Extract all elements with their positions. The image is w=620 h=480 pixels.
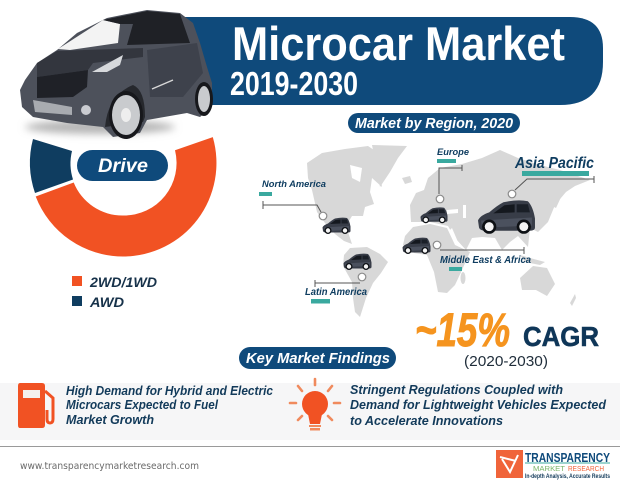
market by region heading pill: Market by Region, 2020	[355, 116, 513, 132]
segment: 2WD/1WD	[36, 137, 216, 256]
CAGR callout: (2020-2030)	[464, 353, 548, 370]
CAGR callout	[415, 303, 599, 370]
logo	[496, 450, 611, 480]
finding 2 text: Demand for Lightweight Vehicles Expected	[350, 398, 606, 412]
website url: www.transparencymarketresearch.com	[20, 461, 199, 472]
car hero image	[20, 10, 213, 139]
legend: 2WD/1WD	[89, 274, 157, 290]
finding 1 text	[66, 384, 273, 427]
world map	[307, 145, 590, 317]
finding 1 text: High Demand for Hybrid and Electric	[66, 384, 273, 398]
region: Asia Pacific	[478, 155, 594, 234]
finding 1 text: Market Growth	[66, 413, 154, 427]
region: North America: North America	[262, 179, 327, 190]
region: Latin America: Latin America	[305, 287, 367, 298]
finding 2 text: Stringent Regulations Coupled with	[350, 383, 563, 397]
icon: fuel pump	[18, 383, 53, 428]
subtitle: years: 2019-2030	[230, 65, 358, 102]
title: Microcar Market: Microcar Market	[232, 17, 565, 70]
key market findings pill: Key Market Findings	[246, 350, 390, 367]
logo: RESEARCH	[568, 466, 604, 473]
region: North America	[259, 179, 350, 234]
finding 2 text: to Accelerate Innovations	[350, 414, 503, 428]
title banner	[180, 17, 603, 105]
finding 2 text	[350, 383, 606, 428]
region: Europe	[420, 147, 470, 223]
icon: light bulb	[290, 379, 340, 430]
region: Asia Pacific: Asia Pacific	[514, 155, 594, 172]
findings band	[0, 383, 620, 440]
drive label pill: Drive	[98, 155, 148, 177]
CAGR callout: ~15%	[415, 303, 510, 356]
logo: MARKET	[533, 466, 566, 473]
drive label pill	[77, 150, 168, 181]
legend: AWD	[89, 294, 124, 310]
region: Latin America	[305, 254, 372, 304]
region: Middle East & Africa: Middle East & Africa	[440, 255, 532, 266]
segment: AWD	[30, 139, 73, 193]
region: Middle East & Africa	[402, 238, 532, 271]
finding 1 text: Microcars Expected to Fuel	[66, 398, 218, 412]
donut chart: drive	[30, 137, 216, 256]
region: Europe: Europe	[437, 147, 470, 158]
CAGR callout: CAGR	[523, 321, 599, 352]
legend	[72, 274, 157, 310]
